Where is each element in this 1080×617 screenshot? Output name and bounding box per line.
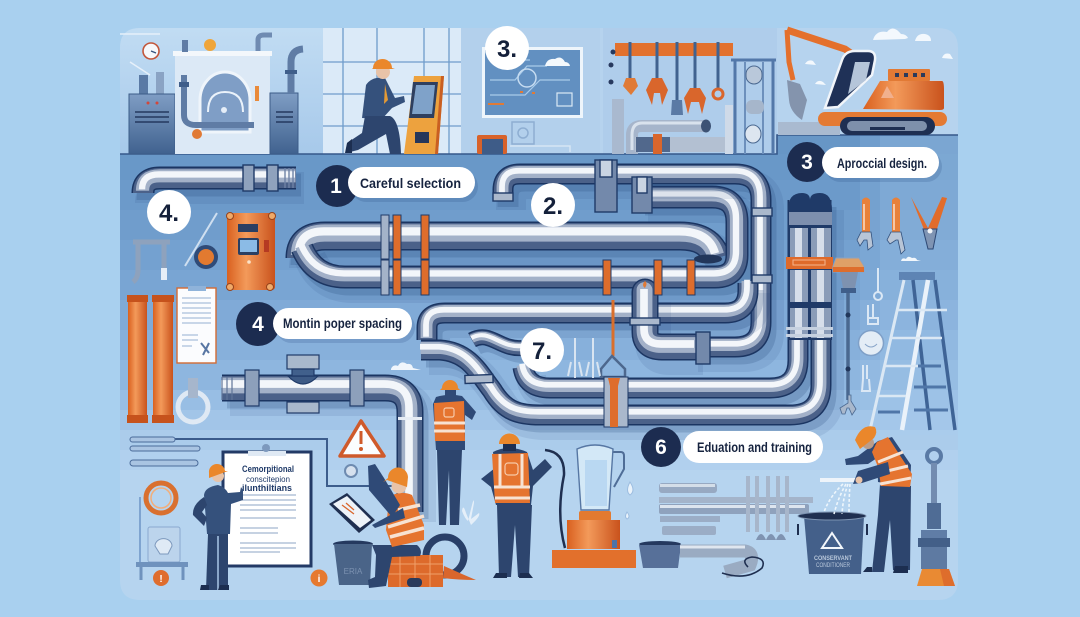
icon: orange control box xyxy=(226,212,276,290)
icon: ring hook xyxy=(178,378,208,422)
icon: small plant xyxy=(462,500,479,525)
icon: cloud right xyxy=(901,257,921,261)
document board: Cemorpitional xyxy=(242,464,294,475)
pipe: opening of upper run xyxy=(694,254,722,264)
callout 4: spacing xyxy=(236,302,415,346)
callout 4: spacing: 4 xyxy=(252,313,264,336)
callout 1: careful selection xyxy=(316,165,478,207)
pipe: loop two xyxy=(502,171,769,357)
icon: water stream xyxy=(824,484,850,514)
icon: excavator xyxy=(778,28,953,135)
figure: seated worker with tablet xyxy=(329,464,424,588)
icon: big drum with warning: CONDITIONER xyxy=(816,563,851,569)
badge: 2.: 2. xyxy=(543,193,563,220)
icon: big drum with warning: CONSERVANT xyxy=(814,555,852,562)
icon: wrenches and pliers xyxy=(857,197,947,254)
icon: ladder xyxy=(870,272,955,430)
pipe: riser with domed top xyxy=(644,289,703,357)
icon: gray wall fittings xyxy=(133,242,170,282)
badge: 2. xyxy=(531,183,575,227)
badge: 7. xyxy=(520,328,564,372)
icon: orange info dots: i xyxy=(318,574,321,585)
flanges: riser and return line xyxy=(465,281,710,383)
icon: tool and knob xyxy=(185,213,218,269)
icon: cable reel and toolbox xyxy=(388,537,476,587)
icon: round dial xyxy=(858,330,884,356)
figure: worker from back with vest xyxy=(433,380,476,525)
icon: schematic board xyxy=(477,47,583,154)
icon: clamp on long pipes xyxy=(601,300,628,427)
icon: big drum with warning xyxy=(798,512,867,574)
pipe: valve run and down leg xyxy=(221,384,418,522)
panel: top illustration strip xyxy=(120,28,958,160)
callout 6: education: Eduation and training xyxy=(697,439,812,455)
document board: ilunthiltians xyxy=(242,483,292,493)
icon: small cloud xyxy=(391,362,421,370)
flanges: top left pipe xyxy=(243,165,293,191)
callout 3: design: 3 xyxy=(801,151,813,174)
badge: 3. xyxy=(485,26,529,70)
icon: orange columns xyxy=(127,295,174,423)
callout 6: education xyxy=(641,427,823,467)
document board xyxy=(223,444,311,566)
flanges: upper valve pair xyxy=(493,160,772,283)
pipe: mid return line xyxy=(426,280,756,350)
valve: flanged valve on left pipe xyxy=(222,355,422,420)
pipe stack: double vertical columns xyxy=(786,193,833,340)
badge: 3.: 3. xyxy=(497,36,517,63)
pipe: large upper run xyxy=(299,231,724,268)
callout 6: education: 6 xyxy=(655,436,667,459)
icon: small accessories xyxy=(862,268,882,391)
pipe: long run to left stack xyxy=(522,197,806,398)
icon: hanging tools rail xyxy=(608,42,733,115)
figure: standing worker with vest xyxy=(481,434,552,578)
icon: small hanging fittings xyxy=(568,338,600,378)
callout 4: spacing: Montin poper spacing xyxy=(283,315,402,331)
icon: orange info dots: ! xyxy=(159,574,163,585)
badge: 4.: 4. xyxy=(159,200,179,227)
document board: conscitepion xyxy=(246,474,290,484)
icon: rods and signal cable xyxy=(130,437,400,486)
icon: hose coil xyxy=(146,483,176,513)
icon: workbench with helmet display xyxy=(136,497,188,580)
pipe: long bottom run to right stack xyxy=(420,197,829,425)
icon: bucket under seated worker xyxy=(333,540,373,585)
icon: stack of spare pipes xyxy=(659,476,813,540)
icon: small drum, elbow hose and cable xyxy=(639,541,763,576)
pipe: top left elbow xyxy=(142,174,304,203)
pipe: small S bend xyxy=(471,335,527,355)
figure: bending worker over drum xyxy=(820,426,912,573)
callout 3: design xyxy=(787,142,942,182)
badge: 7.: 7. xyxy=(532,338,552,365)
icon: warning triangle xyxy=(340,421,384,456)
icon: water blender pump xyxy=(545,445,636,568)
icon: orange info dots xyxy=(153,570,328,586)
icon: clipboard xyxy=(177,286,216,363)
pipe: lower run with return bend xyxy=(301,193,745,287)
icon: boiler and furnace machinery xyxy=(120,34,303,154)
icon: hydrant valve stand xyxy=(917,449,955,586)
icon: bucket under seated worker: ERIA xyxy=(344,567,363,576)
callout 1: careful selection: 1 xyxy=(330,175,342,198)
panel: pipe network background xyxy=(120,135,958,600)
callout 1: careful selection: Careful selection xyxy=(360,175,461,191)
badge: 4. xyxy=(147,190,191,234)
flanges: orange clamps on main runs xyxy=(381,215,695,295)
callout 3: design: Aproccial design. xyxy=(837,155,927,171)
icon: gauge on rod tool xyxy=(833,258,864,415)
icon: kneeling worker at kiosk xyxy=(345,59,444,154)
figure: worker at board xyxy=(193,464,243,590)
icon: workshop pipes xyxy=(612,60,776,154)
